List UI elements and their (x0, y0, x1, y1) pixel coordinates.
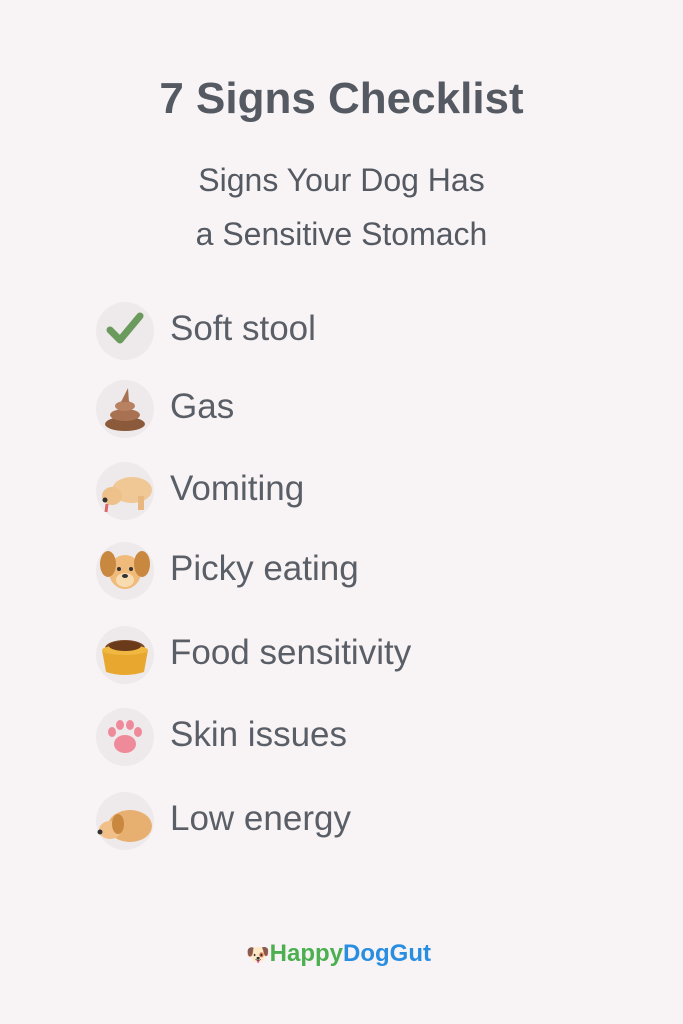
title: 7 Signs Checklist (159, 74, 524, 123)
icon: poop (96, 380, 154, 438)
item: gas (96, 380, 234, 438)
subtitle (196, 162, 487, 252)
icon: bowl (96, 626, 154, 684)
item: vomiting (96, 462, 304, 520)
item: picky eating (96, 542, 359, 600)
logo: 🐶HappyDogGut (246, 940, 431, 967)
item: skin issues: Skin issues (170, 715, 347, 754)
item: low energy: Low energy (170, 799, 351, 838)
icon: check (96, 302, 154, 360)
item: food sensitivity: Food sensitivity (170, 633, 411, 672)
icon: dog face (96, 542, 154, 600)
item: skin issues (96, 708, 347, 766)
item: low energy (96, 792, 351, 850)
item: vomiting: Vomiting (170, 469, 304, 508)
icon: paw (96, 708, 154, 766)
icon: sleepy dog (96, 792, 154, 850)
icon: sick dog (96, 462, 154, 520)
subtitle: Signs Your Dog Has (198, 162, 485, 198)
item: soft stool (96, 302, 316, 360)
item: soft stool: Soft stool (170, 309, 316, 348)
subtitle: a Sensitive Stomach (196, 216, 487, 252)
item: food sensitivity (96, 626, 412, 684)
item: picky eating: Picky eating (170, 549, 359, 588)
item: gas: Gas (170, 387, 234, 426)
